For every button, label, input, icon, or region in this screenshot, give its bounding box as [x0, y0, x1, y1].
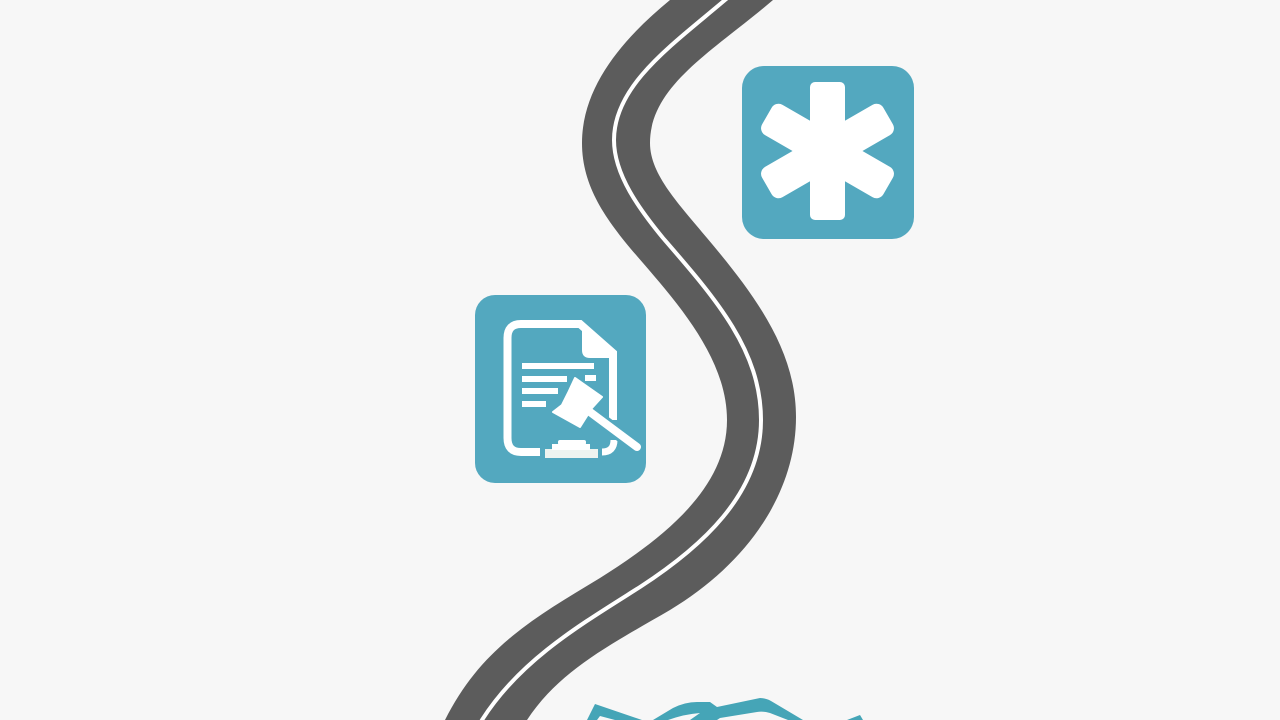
- document corner: [602, 440, 614, 452]
- gavel base: [545, 440, 598, 458]
- document text lines: [522, 363, 596, 407]
- document fold: [582, 322, 617, 358]
- icon: teal outline partially cropped at bottom edge: [587, 698, 863, 720]
- road surface: [440, 0, 796, 720]
- icon: medical asterisk: [742, 66, 914, 239]
- road centre line: [476, 0, 761, 720]
- document outline: [508, 324, 613, 452]
- gavel: [548, 373, 637, 447]
- icon: legal document with gavel: [475, 295, 646, 483]
- winding road: [440, 0, 796, 720]
